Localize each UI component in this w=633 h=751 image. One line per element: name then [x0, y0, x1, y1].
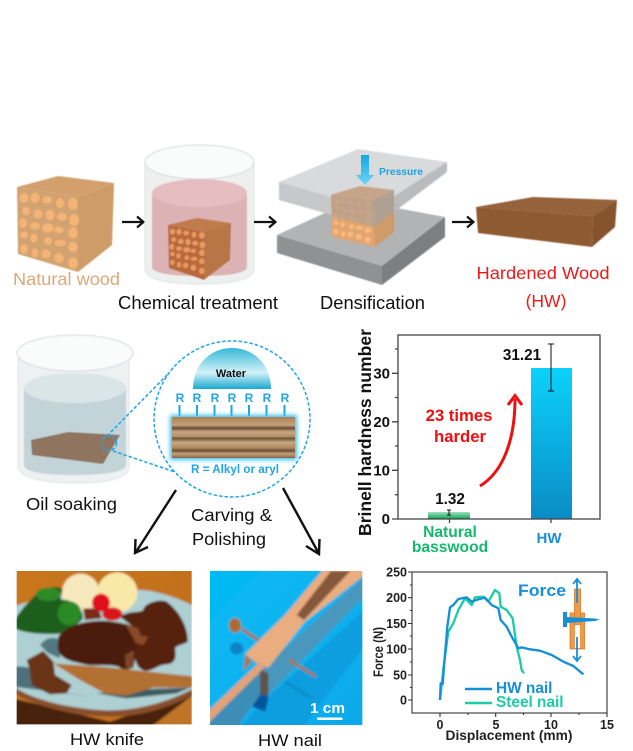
tick labels	[386, 566, 407, 708]
R groups: R	[228, 391, 237, 405]
hardened wood block	[476, 197, 617, 247]
tick labels: 0	[382, 511, 390, 528]
tick labels: 50	[393, 668, 407, 682]
zoom circle	[154, 341, 310, 497]
label: hardened wood: (HW)	[526, 291, 566, 311]
wood cross-section	[170, 415, 297, 460]
tick labels: 0	[400, 694, 407, 708]
tick labels: 30	[373, 366, 390, 382]
hardness bars	[428, 368, 572, 519]
tick labels: 100	[386, 642, 407, 656]
R groups: R	[211, 391, 220, 405]
category labels: Natural	[423, 524, 477, 541]
value labels	[435, 347, 542, 508]
callout: 23 times harder: 23 times	[426, 406, 492, 425]
legend: HW nail	[496, 680, 552, 697]
callout: 23 times harder	[426, 406, 492, 446]
tick labels: 250	[386, 566, 407, 580]
axis title: force: Force (N)	[370, 627, 386, 677]
label: water: Water	[216, 368, 247, 380]
label: hardened wood: Hardened Wood	[476, 263, 610, 283]
tick labels	[373, 366, 390, 528]
oil soaking beaker	[17, 335, 133, 483]
x tick labels: 5	[493, 718, 500, 732]
label: carving and polishing: Polishing	[192, 529, 266, 549]
x tick labels: 15	[600, 718, 614, 732]
x tick labels: 0	[437, 718, 444, 732]
axis title: Brinell hardness number	[355, 329, 375, 536]
R groups	[176, 391, 290, 416]
beaker with chemical treatment	[145, 145, 254, 284]
category labels: HW	[536, 530, 562, 547]
R groups: R	[263, 391, 272, 405]
label: carving and polishing: Carving &	[191, 505, 272, 525]
label: R definition: R = Alkyl or aryl	[191, 462, 279, 476]
bar chart: Brinell hardness	[355, 329, 600, 556]
arrow: to densification	[254, 216, 276, 228]
label: HW knife: HW knife	[70, 731, 144, 749]
error bars	[447, 344, 554, 515]
R groups: R	[281, 391, 290, 405]
legend	[465, 680, 564, 711]
chart frame and ticks	[408, 572, 607, 717]
axis title: displacement: Displacement (mm)	[446, 727, 572, 743]
arrow: to chemical treatment	[122, 216, 144, 228]
densification press	[277, 149, 447, 285]
R groups: R	[193, 391, 202, 405]
natural wood cube	[17, 176, 114, 272]
label: HW nail: HW nail	[258, 732, 322, 750]
label: densification: Densification	[320, 293, 425, 313]
tick labels: 200	[386, 591, 407, 605]
photo: HW nail	[207, 568, 366, 728]
HW nail curve	[440, 597, 583, 700]
R groups: R	[245, 391, 254, 405]
red curved arrow	[480, 396, 522, 486]
legend: Steel nail	[496, 694, 564, 711]
tick labels: 10	[373, 462, 390, 480]
R groups: R	[176, 391, 185, 405]
water droplet	[193, 348, 271, 389]
infographic: hardened wood process and performance	[14, 144, 618, 746]
label: pressure: Pressure	[379, 166, 423, 178]
photo: HW knife	[13, 568, 195, 728]
label: carving and polishing	[191, 505, 272, 549]
x tick labels: 10	[544, 718, 558, 732]
label: hardened wood	[476, 263, 610, 311]
label: force: Force	[518, 581, 566, 600]
tick labels: 150	[386, 617, 407, 631]
scale bar: 1 cm: 1 cm	[310, 701, 345, 717]
arrow: to nail	[283, 488, 320, 554]
category labels: basswood	[412, 539, 488, 556]
category labels	[412, 524, 562, 556]
steel nail curve	[440, 590, 524, 700]
x tick labels	[437, 718, 614, 732]
line chart: force vs displacement	[370, 566, 614, 743]
value labels: 1.32	[435, 491, 465, 508]
tick labels: 20	[373, 414, 390, 431]
icon: nail test	[563, 579, 600, 661]
arrow: to knife	[135, 490, 176, 553]
arrow: to hardened wood	[452, 216, 474, 228]
pressure arrow	[356, 155, 374, 185]
label: natural wood: Natural wood	[13, 269, 120, 289]
chart frame and ticks	[392, 335, 600, 523]
value labels: 31.21	[503, 347, 542, 364]
label: oil soaking: Oil soaking	[26, 494, 117, 514]
zoom callout lines	[102, 372, 175, 472]
callout: 23 times harder: harder	[434, 427, 486, 446]
label: chemical treatment: Chemical treatment	[118, 293, 278, 313]
